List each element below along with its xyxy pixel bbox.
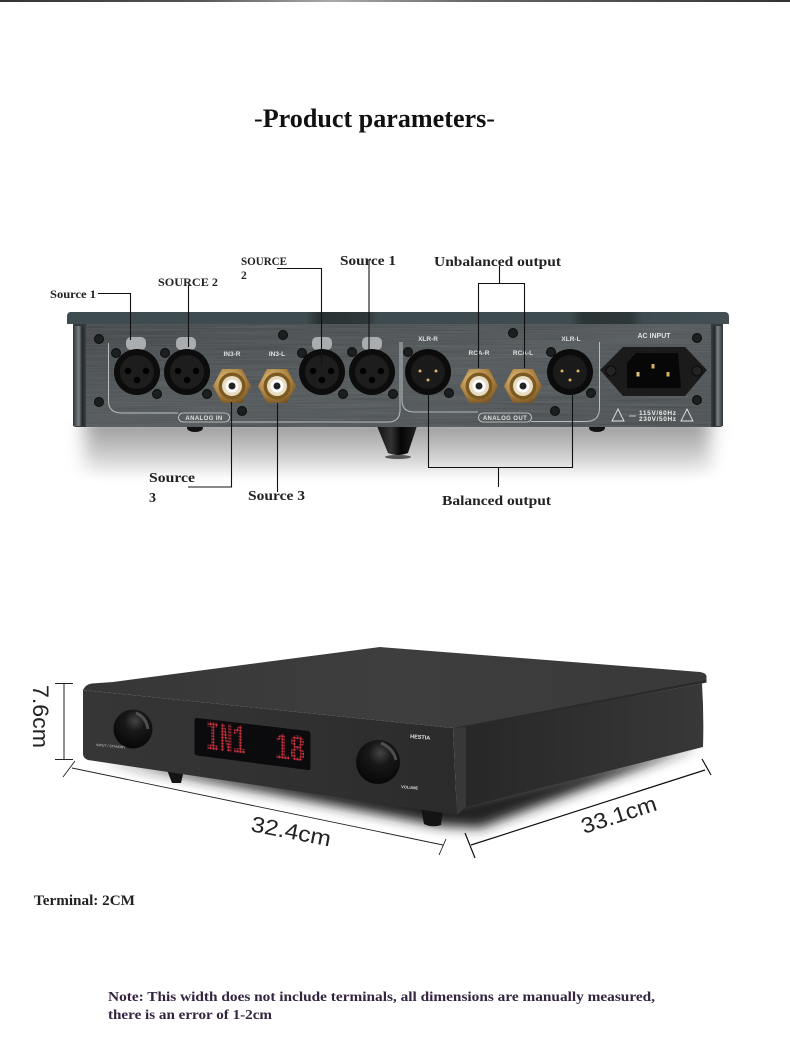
feet bbox=[167, 770, 443, 826]
XLR output connectors bbox=[405, 349, 593, 395]
panel screws bbox=[94, 328, 702, 416]
callout: source 3 left: Source bbox=[149, 471, 195, 486]
XLR-L output bbox=[547, 349, 593, 395]
side curves bbox=[73, 326, 86, 426]
dimension: width bbox=[63, 761, 446, 855]
callout: balanced output: Balanced output bbox=[442, 494, 551, 509]
center foot bbox=[377, 426, 417, 459]
RCA out L bbox=[504, 369, 542, 403]
brand label: HESTIA bbox=[410, 734, 430, 742]
input knob bbox=[114, 710, 152, 748]
voltage rating: 230V/50Hz bbox=[639, 416, 677, 423]
input label: INPUT / STANDBY bbox=[96, 743, 126, 750]
rear panel bbox=[73, 322, 723, 427]
panel labels bbox=[224, 333, 671, 358]
callout: source 2 left: SOURCE 2 bbox=[158, 275, 218, 289]
XLR input 1 bbox=[114, 337, 160, 395]
panel labels: RCA-R bbox=[469, 350, 490, 357]
footnote: Note: This width does not include terminals, all dimensions are manually measured, bbox=[108, 989, 655, 1004]
side face bbox=[466, 684, 703, 807]
front face bbox=[83, 690, 457, 815]
panel labels: IN3-L bbox=[269, 351, 285, 358]
XLR input 3 bbox=[299, 337, 345, 395]
display bbox=[194, 714, 310, 770]
top strip bbox=[0, 0, 790, 2]
panel labels: RCA-L bbox=[513, 350, 533, 357]
dimension: depth: 33.1cm bbox=[578, 791, 660, 839]
AC input socket bbox=[600, 347, 707, 396]
callout: source 3 right: Source 3 bbox=[248, 488, 305, 503]
analog in outline bbox=[108, 342, 400, 422]
terminal note: Terminal: 2CM bbox=[34, 893, 135, 909]
ground shadow bbox=[100, 745, 700, 828]
callout: source 2 right: SOURCE bbox=[241, 256, 287, 268]
voltage rating: 115V/60Hz bbox=[639, 410, 677, 417]
title: -Product parameters- bbox=[254, 104, 495, 133]
lid lip bbox=[453, 680, 706, 728]
footnote bbox=[108, 989, 655, 1022]
volume knob bbox=[356, 740, 400, 784]
XLR input 4 bbox=[349, 337, 395, 395]
RCA IN3-L bbox=[258, 369, 296, 403]
panel labels: XLR-R bbox=[418, 336, 438, 343]
callout: source 2 right: 2 bbox=[241, 270, 247, 282]
footnote: there is an error of 1-2cm bbox=[108, 1007, 273, 1022]
analog out label bbox=[478, 413, 532, 422]
front view product photo bbox=[83, 647, 706, 828]
callout: source 1 right: Source 1 bbox=[340, 253, 396, 268]
callout: source 1 left: Source 1 bbox=[50, 289, 96, 301]
analog out outline bbox=[402, 342, 600, 422]
analog in label: ANALOG IN bbox=[185, 416, 223, 422]
small feet bbox=[187, 424, 605, 432]
callout: unbalanced output: Unbalanced output bbox=[434, 255, 561, 270]
rear view product photo bbox=[67, 312, 729, 480]
XLR input 2 bbox=[164, 337, 210, 395]
callout: source 3 left bbox=[149, 471, 195, 506]
display: IN1 bbox=[206, 714, 246, 767]
panel labels: IN3-R bbox=[224, 351, 241, 358]
RCA out R bbox=[460, 369, 498, 403]
lid bbox=[67, 312, 729, 324]
dimension: width: 32.4cm bbox=[249, 811, 333, 851]
panel labels: XLR-L bbox=[561, 336, 581, 343]
volume label: VOLUME bbox=[401, 784, 419, 791]
voltage rating bbox=[612, 409, 693, 423]
display: 18 bbox=[275, 725, 305, 770]
top surface bbox=[83, 647, 706, 728]
callout: source 2 right bbox=[241, 256, 287, 282]
dimension: height: 7.6cm bbox=[28, 685, 53, 748]
leader lines bbox=[98, 260, 572, 492]
XLR-R output bbox=[405, 349, 451, 395]
panel labels: AC INPUT bbox=[637, 333, 671, 340]
analog in label bbox=[178, 413, 230, 422]
floor shadow bbox=[85, 424, 710, 480]
RCA IN3-R bbox=[213, 369, 251, 403]
dimension: height bbox=[28, 684, 73, 760]
analog out label: ANALOG OUT bbox=[483, 416, 527, 422]
callout: source 3 left: 3 bbox=[149, 491, 156, 506]
dimension: depth bbox=[465, 759, 711, 858]
RCA connectors bbox=[213, 369, 542, 403]
corner strip bbox=[453, 727, 466, 815]
XLR input connectors bbox=[114, 337, 395, 395]
